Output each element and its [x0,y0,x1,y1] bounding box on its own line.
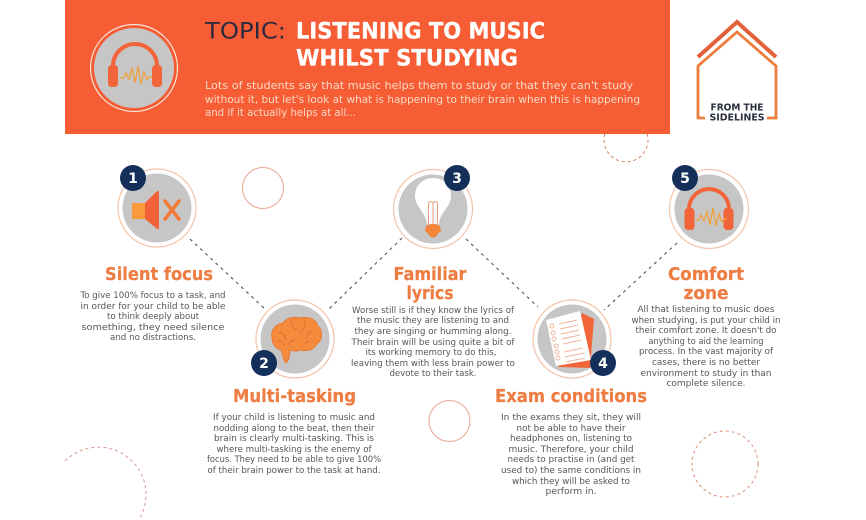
panel: Multi-tasking: of their brain power to the task at hand. [208,465,380,475]
title: LISTENING TO MUSIC [296,18,545,44]
panel: Comfort zone: complete silence. [666,378,746,388]
panel: Comfort zone [632,264,780,388]
intro text [205,80,640,119]
step 5: headphones icon [670,165,748,248]
panel: Multi-tasking: If your child is listening to music and [213,412,375,422]
logo: From the Sidelines [698,22,776,124]
title: WHILST STUDYING [296,46,518,72]
panel: Familiar lyrics: leaving them with less brain power to [351,358,515,368]
panel: Silent focus: and no distractions. [110,332,196,342]
panel: Familiar lyrics [350,264,516,378]
panel: Familiar lyrics: devote to their task. [390,368,476,378]
logo: From the Sidelines: FROM THE [710,103,764,114]
step 2: brain icon [251,300,334,378]
panel: Comfort zone: Comfort [668,264,744,285]
panel: Familiar lyrics: Their brain will be using quite a bit of [350,337,516,347]
panel: Comfort zone: All that listening to music does [638,304,774,314]
step 4: exam papers icon [533,300,616,378]
panel: Exam conditions: used to) the same conditions in [501,465,641,475]
title [204,18,545,72]
logo: From the Sidelines: SIDELINES [710,113,765,124]
panel: Exam conditions: Exam conditions [495,386,647,407]
panel: Multi-tasking: brain is clearly multi-tasking. This is [214,433,374,443]
panel: Comfort zone: when studying, is put your child in [632,315,780,325]
panel: Silent focus: something, they need silence [82,322,224,332]
panel: Multi-tasking [207,386,381,475]
panel: Silent focus: to think deeply about [107,311,200,321]
panel: Exam conditions: which they will be asked to [512,476,630,486]
panel: Multi-tasking: nodding along to the beat, then their [214,423,375,433]
panel: Comfort zone: anything to aid the learning [648,336,764,346]
panel: Exam conditions: perform in. [546,486,596,496]
step 1: muted speaker icon [118,165,196,247]
panel: Comfort zone: environment to study in than [640,368,772,378]
badge 4: 4 [598,356,608,372]
title: TOPIC: [204,18,286,44]
panel: Familiar lyrics: the music they are listening to and [357,315,509,325]
panel: Exam conditions: needs to practise in (and get [508,454,635,464]
panel: Silent focus [79,264,225,342]
panel: Silent focus: To give 100% focus to a task, and [79,290,225,300]
panel: Multi-tasking: Multi-tasking [233,386,356,407]
badge 2: 2 [259,356,269,372]
step 3: light bulb icon [394,165,472,248]
intro text: without it, but let's look at what is happening to their brain when this is happening [205,94,640,106]
badge 1: 1 [128,171,138,187]
panel: Multi-tasking: focus. They need to be able to give 100% [207,454,381,464]
badge 5: 5 [680,171,690,187]
panel: Comfort zone: process. In the vast majority of [639,346,774,356]
panel: Exam conditions [495,386,647,496]
panel: Familiar lyrics: lyrics [406,283,454,304]
panel: Familiar lyrics: Worse still is if they know the lyrics of [352,305,515,315]
panel: Familiar lyrics: they are singing or humming along. [354,326,512,336]
icon: headphones [90,24,178,112]
panel: Familiar lyrics: its working memory to do this, [366,347,496,357]
panel: Exam conditions: headphones on, listening to [510,433,632,443]
panel: Silent focus: Silent focus [105,264,213,285]
panel: Exam conditions: In the exams they sit, they will [501,412,641,422]
panel: Comfort zone: zone [684,283,728,304]
panel: Silent focus: in order for your child to be able [80,301,226,311]
panel: Multi-tasking: where multi-tasking is the enemy of [216,444,373,454]
panel: Exam conditions: not be able to have their [516,423,626,433]
header banner [65,0,670,134]
intro text: and if it actually helps at all... [205,107,356,119]
panel: Familiar lyrics: Familiar [394,264,467,285]
panel: Exam conditions: music. Therefore, your child [508,444,634,454]
panel: Comfort zone: cases, there is no better [652,357,761,367]
badge 3: 3 [452,171,462,187]
panel: Comfort zone: their comfort zone. It doesn't do [636,325,776,335]
intro text: Lots of students say that music helps them to study or that they can't study [205,80,633,92]
